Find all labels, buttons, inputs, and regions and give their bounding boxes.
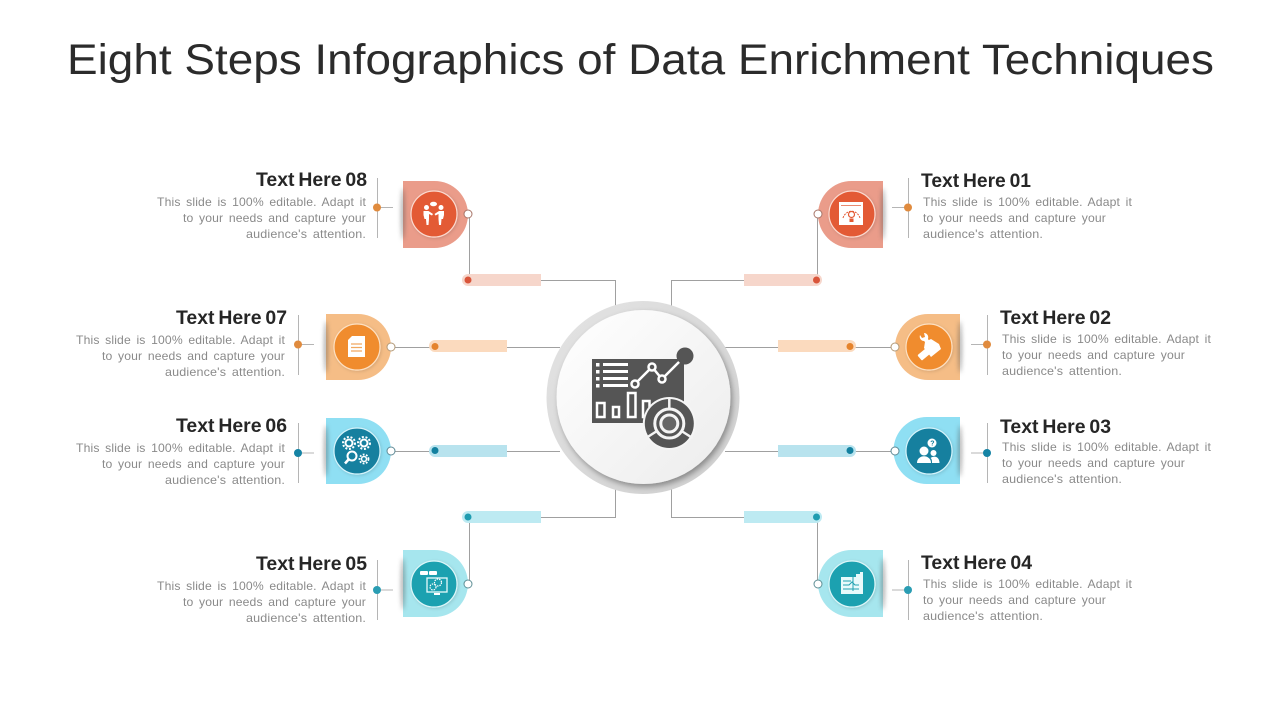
description: to your needs and capture your xyxy=(102,349,285,363)
marker xyxy=(971,423,991,483)
icon: data analytics board xyxy=(592,348,696,450)
step 08 xyxy=(157,170,541,286)
badge xyxy=(324,314,395,380)
badge xyxy=(891,314,962,380)
description xyxy=(923,195,1133,241)
badge xyxy=(891,417,962,484)
marker xyxy=(373,560,393,620)
description: to your needs and capture your xyxy=(102,457,285,471)
step 06 xyxy=(76,416,507,487)
heading: Text Here 06 xyxy=(176,416,287,437)
badge xyxy=(324,418,395,484)
description: audience's attention. xyxy=(923,609,1043,623)
icon: document xyxy=(348,336,365,357)
description xyxy=(76,441,286,487)
marker xyxy=(892,178,912,238)
description: audience's attention. xyxy=(923,227,1043,241)
description xyxy=(76,333,286,379)
heading: Text Here 04 xyxy=(921,553,1032,574)
step 01 xyxy=(744,171,1133,286)
icon: browser with idea bulb xyxy=(839,202,863,225)
badge xyxy=(401,550,472,617)
marker xyxy=(892,560,912,620)
badge xyxy=(814,550,885,617)
heading: Text Here 08 xyxy=(256,170,367,191)
description: to your needs and capture your xyxy=(1002,456,1185,470)
marker xyxy=(373,178,393,238)
icon: gears and magnifier xyxy=(343,437,370,464)
description xyxy=(157,579,367,625)
accent bar xyxy=(462,274,541,286)
step 04 xyxy=(744,511,1133,623)
description xyxy=(1002,440,1212,486)
title: Eight Steps Infographics of Data Enrichment Techniques xyxy=(67,36,1214,84)
connector lines to hub xyxy=(395,218,891,580)
description: This slide is 100% editable. Adapt it xyxy=(76,333,286,347)
step 02 xyxy=(778,308,1212,380)
description: This slide is 100% editable. Adapt it xyxy=(923,195,1133,209)
heading: Text Here 05 xyxy=(256,554,367,575)
marker xyxy=(294,315,314,375)
icon: hand with wrench xyxy=(917,333,941,361)
step 05 xyxy=(157,511,541,625)
description: This slide is 100% editable. Adapt it xyxy=(1002,440,1212,454)
description: to your needs and capture your xyxy=(923,211,1106,225)
description xyxy=(923,577,1133,623)
accent bar xyxy=(462,511,541,523)
heading: Text Here 03 xyxy=(1000,417,1111,438)
description: audience's attention. xyxy=(1002,472,1122,486)
description: audience's attention. xyxy=(165,365,285,379)
description xyxy=(1002,332,1212,378)
marker xyxy=(294,423,314,483)
icon: two people talking xyxy=(424,202,444,225)
accent bar xyxy=(429,445,507,457)
step 07 xyxy=(76,308,507,380)
heading: Text Here 01 xyxy=(921,171,1031,192)
marker xyxy=(971,315,991,375)
description xyxy=(157,195,367,241)
description: to your needs and capture your xyxy=(183,595,366,609)
description: audience's attention. xyxy=(246,611,366,625)
accent bar xyxy=(778,340,856,352)
heading: Text Here 07 xyxy=(176,308,287,329)
accent bar xyxy=(744,274,822,286)
step 03 xyxy=(778,417,1212,486)
central hub xyxy=(546,301,740,494)
icon: people with question xyxy=(917,438,940,463)
description: This slide is 100% editable. Adapt it xyxy=(1002,332,1212,346)
description: to your needs and capture your xyxy=(923,593,1106,607)
description: audience's attention. xyxy=(246,227,366,241)
icon: monitor with gears xyxy=(420,571,447,595)
description: This slide is 100% editable. Adapt it xyxy=(157,579,367,593)
description: to your needs and capture your xyxy=(1002,348,1185,362)
badge xyxy=(401,181,472,248)
description: to your needs and capture your xyxy=(183,211,366,225)
accent bar xyxy=(744,511,822,523)
heading: Text Here 02 xyxy=(1000,308,1111,329)
description: This slide is 100% editable. Adapt it xyxy=(923,577,1133,591)
description: This slide is 100% editable. Adapt it xyxy=(76,441,286,455)
badge xyxy=(814,181,885,248)
question mark: ? xyxy=(930,440,935,448)
description: audience's attention. xyxy=(1002,364,1122,378)
accent bar xyxy=(778,445,856,457)
description: audience's attention. xyxy=(165,473,285,487)
accent bar xyxy=(429,340,507,352)
description: This slide is 100% editable. Adapt it xyxy=(157,195,367,209)
icon: dashboard chart xyxy=(841,572,863,594)
